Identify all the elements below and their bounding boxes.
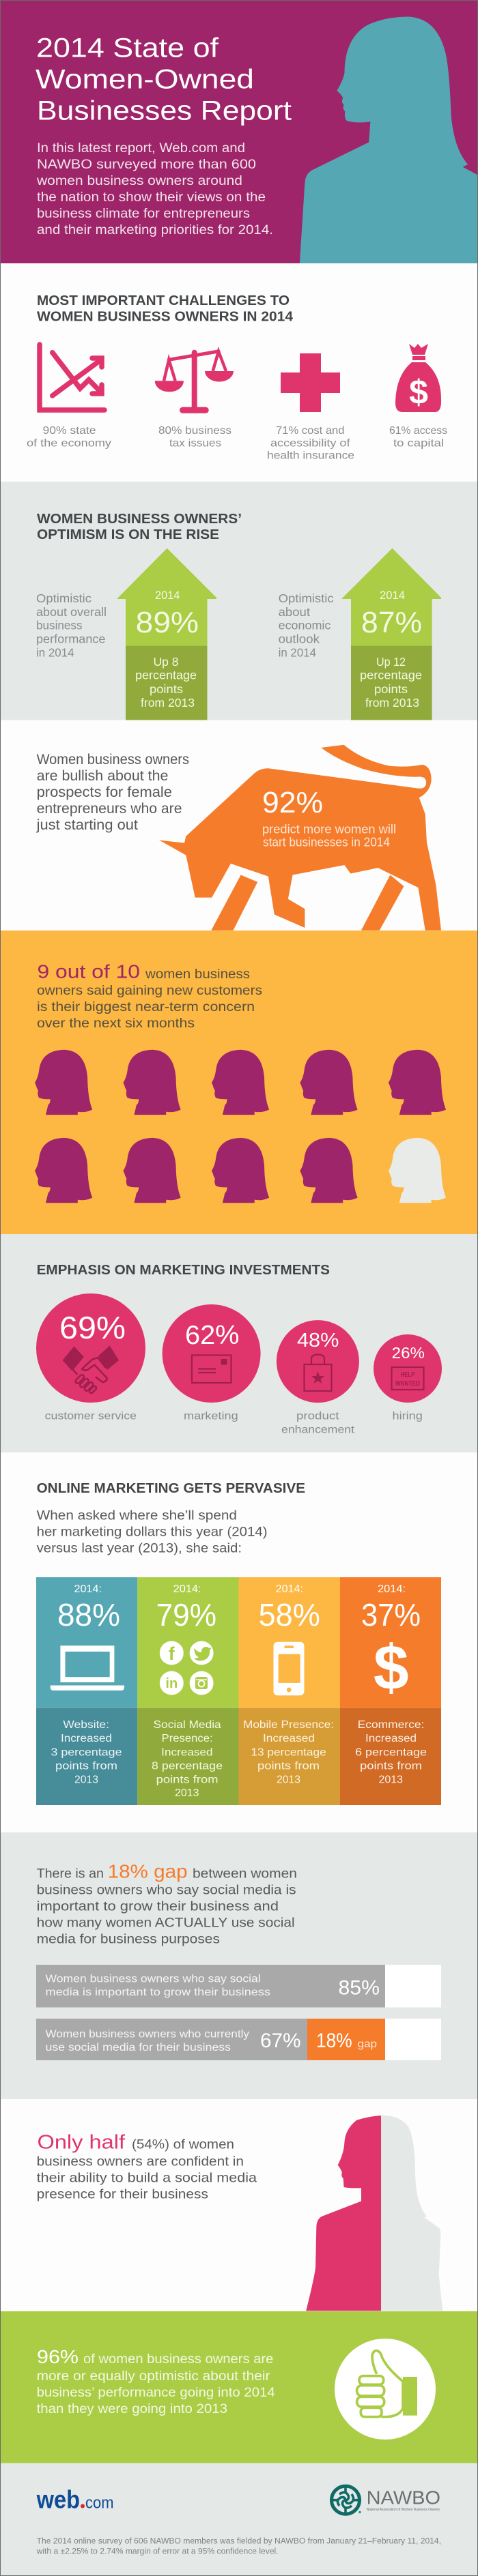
circle: customer service <box>36 1293 145 1403</box>
label: capital: to capital <box>393 438 444 449</box>
bar: says important 85 percent: media is important to grow their business <box>45 1987 270 1998</box>
panel: optimism <box>0 482 478 720</box>
intro paragraph: the nation to show their views on the <box>37 190 266 205</box>
label: health insurance <box>267 425 354 461</box>
text: 9 out of 10: over the next six months <box>37 1016 195 1031</box>
text: economic outlook: in 2014 <box>279 645 316 659</box>
caption: ecommerce: 2013 <box>378 1774 403 1785</box>
icons: social networks <box>160 1641 214 1695</box>
icon: help wanted sign: HELP <box>400 1371 415 1379</box>
text: 96 percent: than they were going into 2013 <box>37 2401 227 2416</box>
icons: ten head silhouettes <box>35 1050 446 1203</box>
column: mobile: 2014: <box>276 1583 303 1595</box>
heading: online marketing: ONLINE MARKETING GETS PERVASIVE <box>37 1481 305 1496</box>
label: tax: tax issues <box>169 438 221 449</box>
column: website <box>36 1577 137 1805</box>
text: economic outlook: economic <box>279 619 331 632</box>
caption: ecommerce: points from <box>360 1760 422 1772</box>
text: bullish: are bullish about the <box>37 768 168 784</box>
label: health insurance: accessibility of <box>270 438 350 449</box>
arrow: 87 percent: 87% <box>361 606 422 639</box>
title: Businesses Report <box>37 96 292 126</box>
text: only half <box>37 2132 257 2201</box>
circle: hiring: 26% <box>392 1344 425 1362</box>
text: business performance <box>36 591 107 659</box>
heading: challenges: WOMEN BUSINESS OWNERS IN 2014 <box>37 310 294 325</box>
text: business performance: performance <box>36 632 105 645</box>
bar: says important 85 percent: Women business owners who say social <box>45 1974 261 1985</box>
icon: bull <box>159 745 441 931</box>
caption: mobile: 13 percentage <box>251 1747 326 1759</box>
panel: 9 out of 10 <box>0 931 478 1234</box>
arrow: 89 percent: 2014 <box>155 589 180 602</box>
icon: medical cross <box>281 353 340 412</box>
text: 9 out of 10: is their biggest near-term concern <box>37 999 255 1014</box>
label: health insurance: 71% cost and <box>276 425 344 437</box>
arrow: 89 percent: percentage <box>135 669 197 682</box>
arrow: 87 percent: points <box>374 682 408 696</box>
caption: website: Website: <box>63 1719 109 1731</box>
column: social media <box>137 1577 239 1805</box>
caption: mobile: 2013 <box>277 1774 300 1785</box>
caption: website: 2013 <box>74 1774 98 1785</box>
text: 96 percent: business’ performance going into 2014 <box>37 2385 275 2400</box>
text: marketing dollars intro: versus last year (2013), she said: <box>37 1541 242 1556</box>
caption: social media: points from <box>156 1774 219 1785</box>
text: economic outlook: outlook <box>279 632 320 645</box>
icon: handshake <box>63 1345 119 1394</box>
panel: 96 percent <box>0 2311 478 2463</box>
text: 9 out of 10 <box>37 961 262 1031</box>
text: 9 out of 10: 9 out of 10 <box>37 961 140 982</box>
panel: bullish <box>0 720 478 931</box>
text: economic outlook <box>279 591 334 659</box>
logo: web.com: web <box>36 2486 80 2513</box>
text: 96 percent: of women business owners are <box>83 2352 273 2367</box>
intro paragraph: NAWBO surveyed more than 600 <box>37 158 256 172</box>
text: only half: business owners are confident in <box>37 2154 244 2169</box>
arrow: 89 percent: 89% <box>136 606 199 639</box>
text: only half: Only half <box>37 2132 126 2154</box>
text: gap explanation: media for business purposes <box>37 1932 220 1947</box>
caption: social media <box>152 1719 223 1799</box>
label: health insurance: health insurance <box>267 450 354 461</box>
text: marketing dollars intro <box>37 1508 267 1556</box>
column: ecommerce <box>340 1577 441 1805</box>
bar: currently use 67 percent with gap: 67% <box>260 2030 301 2052</box>
caption: ecommerce: 6 percentage <box>355 1747 427 1759</box>
circle: product enhancement: 48% <box>297 1330 339 1351</box>
text: bullish: Women business owners <box>37 752 189 767</box>
intro paragraph: In this latest report, Web.com and <box>37 141 245 156</box>
text: gap explanation <box>37 1861 297 1947</box>
column: ecommerce: 37% <box>361 1597 421 1633</box>
circle: marketing: 62% <box>185 1321 239 1350</box>
labels: marketing categories: hiring <box>392 1411 423 1422</box>
text: bullish: just starting out <box>36 817 138 833</box>
caption: mobile <box>243 1719 334 1785</box>
arrow: 87 percent: Up 12 <box>376 655 406 669</box>
text: only half: presence for their business <box>37 2186 208 2201</box>
bar: currently use 67 percent with gap: 18% <box>316 2030 352 2052</box>
caption: social media: Presence: <box>162 1733 213 1744</box>
caption: mobile: Mobile Presence: <box>243 1719 334 1731</box>
silhouette: half filled woman <box>306 2116 442 2311</box>
heading: optimism <box>37 512 242 542</box>
panel: footer <box>0 2463 478 2576</box>
circle: customer service: 69% <box>59 1310 126 1345</box>
text: 96 percent <box>37 2346 275 2416</box>
icon: laptop <box>51 1645 124 1690</box>
icon: money bag: $ <box>409 373 428 411</box>
icons: social networks: in <box>165 1676 178 1691</box>
logo: web.com: com <box>85 2494 113 2512</box>
bar: currently use 67 percent with gap: use social media for their business <box>45 2042 231 2053</box>
text: gap explanation: how many women ACTUALLY use social <box>37 1916 295 1931</box>
heading: optimism: WOMEN BUSINESS OWNERS’ <box>37 512 242 527</box>
circle: product enhancement <box>277 1320 359 1403</box>
text: marketing dollars intro: When asked where she’ll spend <box>37 1508 237 1523</box>
column: social media: 79% <box>156 1597 216 1633</box>
text: 9 out of 10: women business <box>145 967 250 982</box>
caption: mobile: points from <box>257 1760 320 1772</box>
column: mobile <box>239 1577 340 1805</box>
silhouette: woman in profile <box>300 17 478 263</box>
labels: marketing categories: enhancement <box>281 1424 355 1435</box>
title <box>36 33 292 126</box>
stat: 92 percent: start businesses in 2014 <box>263 835 390 849</box>
intro paragraph: women business owners around <box>36 174 242 188</box>
caption: website: Increased <box>61 1733 112 1744</box>
text: bullish: prospects for female <box>37 785 172 800</box>
bar: currently use 67 percent with gap <box>36 2019 441 2060</box>
arrow: 89 percent: points <box>150 682 183 696</box>
caption: ecommerce: Increased <box>365 1733 417 1744</box>
caption: ecommerce <box>355 1719 427 1785</box>
text: business performance: business <box>36 619 83 632</box>
bar: currently use 67 percent with gap: gap <box>358 2038 377 2050</box>
icon: shopping bag <box>305 1355 332 1391</box>
labels: marketing categories: product <box>296 1411 339 1422</box>
stat: 92 percent: 92% <box>262 786 323 819</box>
icon: money bag <box>395 344 441 412</box>
text: bullish <box>36 752 189 833</box>
footnote: with a ±2.25% to 2.74% margin of error at a 95% confidence level. <box>36 2548 279 2556</box>
caption: website: points from <box>55 1760 117 1772</box>
text: 9 out of 10: owners said gaining new customers <box>37 983 262 998</box>
labels: marketing categories: marketing <box>184 1411 238 1422</box>
text: only half: their ability to build a social media <box>37 2170 257 2185</box>
icon: envelope <box>192 1355 231 1383</box>
label: capital: 61% access <box>389 425 447 437</box>
arrow: 87 percent: 2014 <box>380 589 405 602</box>
label: tax: 80% business <box>158 425 231 437</box>
column: ecommerce: 2014: <box>378 1583 406 1595</box>
text: gap explanation: business owners who say social media is <box>37 1883 296 1898</box>
intro paragraph: business climate for entrepreneurs <box>37 207 250 221</box>
logo: NAWBO: NAWBO <box>367 2487 440 2508</box>
intro paragraph: and their marketing priorities for 2014. <box>37 223 273 237</box>
labels: marketing categories: customer service <box>45 1411 137 1422</box>
stat: 92 percent: predict more women will <box>262 823 396 836</box>
panel: marketing investments <box>0 1234 478 1452</box>
bar: currently use 67 percent with gap: Women business owners who currently <box>45 2029 249 2040</box>
text: economic outlook: Optimistic <box>279 591 334 605</box>
icon: smartphone <box>273 1642 305 1695</box>
logo: NAWBO: National Association of Women Business Owners <box>367 2508 440 2512</box>
arrow: 89 percent <box>117 548 216 720</box>
text: only half: (54%) of women <box>132 2137 234 2152</box>
intro paragraph <box>36 141 273 237</box>
heading: optimism: OPTIMISM IS ON THE RISE <box>37 527 219 542</box>
bar: says important 85 percent: 85% <box>339 1977 380 1999</box>
column: social media: 2014: <box>173 1583 201 1595</box>
text: business performance: about overall <box>36 605 107 619</box>
text: bullish: entrepreneurs who are <box>37 801 182 817</box>
column: website: 2014: <box>74 1583 102 1595</box>
bar: says important 85 percent <box>36 1965 441 2007</box>
label: tax <box>158 425 231 449</box>
label: capital <box>389 425 447 449</box>
label: economy <box>27 425 111 449</box>
text: business performance: Optimistic <box>36 591 92 605</box>
caption: social media: Increased <box>161 1747 213 1759</box>
panel: challenges <box>0 263 478 482</box>
text: marketing dollars intro: her marketing dollars this year (2014) <box>37 1525 267 1540</box>
text: 96 percent: more or equally optimistic about their <box>37 2369 270 2384</box>
text: gap explanation: between women <box>193 1867 297 1882</box>
text: business performance: in 2014 <box>36 645 74 659</box>
heading: challenges: MOST IMPORTANT CHALLENGES TO <box>37 293 290 308</box>
column: website: 88% <box>57 1597 120 1633</box>
title: Women-Owned <box>36 64 254 94</box>
text: economic outlook: about <box>279 605 310 619</box>
panel: 18 percent gap <box>0 1832 478 2099</box>
icon: economy chart <box>40 345 104 410</box>
circle: marketing <box>163 1304 261 1403</box>
panel: only half <box>0 2099 478 2311</box>
column: mobile: 58% <box>259 1597 320 1633</box>
caption: social media: 2013 <box>175 1787 199 1799</box>
icon: dollar sign: $ <box>374 1632 409 1703</box>
icon: help wanted sign <box>392 1367 423 1390</box>
arrow: 89 percent: Up 8 <box>153 655 179 669</box>
heading: marketing investments: EMPHASIS ON MARKETING INVESTMENTS <box>37 1263 330 1278</box>
label: economy: 90% state <box>42 425 96 437</box>
logo: web.com <box>36 2486 114 2513</box>
arrow: 87 percent: percentage <box>360 669 422 682</box>
arrow: 89 percent: from 2013 <box>141 696 195 709</box>
footnote: The 2014 online survey of 606 NAWBO members was fielded by NAWBO from January 21–February 11, 2014, <box>37 2538 441 2546</box>
icon: help wanted sign: WANTED <box>395 1379 420 1388</box>
heading: challenges <box>37 293 294 325</box>
arrow: 87 percent: from 2013 <box>365 696 419 709</box>
icons: social networks: f <box>169 1643 175 1664</box>
arrow: 87 percent <box>341 548 441 720</box>
icon: scales <box>155 350 234 413</box>
text: gap explanation: important to grow their business and <box>37 1899 279 1914</box>
caption: social media: Social Media <box>153 1719 221 1731</box>
text: gap explanation: 18% gap <box>108 1861 188 1882</box>
caption: website <box>51 1719 122 1785</box>
icon: thumbs up <box>335 2339 436 2440</box>
panel: header <box>0 0 478 263</box>
caption: website: 3 percentage <box>51 1747 122 1759</box>
panel: online marketing <box>0 1452 478 1832</box>
caption: ecommerce: Ecommerce: <box>358 1719 424 1731</box>
text: 96 percent: 96% <box>37 2346 79 2367</box>
caption: social media: 8 percentage <box>152 1760 223 1772</box>
circle: hiring <box>374 1334 442 1403</box>
text: gap explanation: There is an <box>37 1867 104 1882</box>
label: economy: of the economy <box>27 438 111 449</box>
title: 2014 State of <box>36 33 219 63</box>
logo: NAWBO <box>332 2486 440 2514</box>
stat: 92 percent <box>262 786 396 849</box>
footnote <box>36 2538 441 2556</box>
labels: marketing categories <box>45 1411 423 1435</box>
caption: mobile: Increased <box>263 1733 315 1744</box>
